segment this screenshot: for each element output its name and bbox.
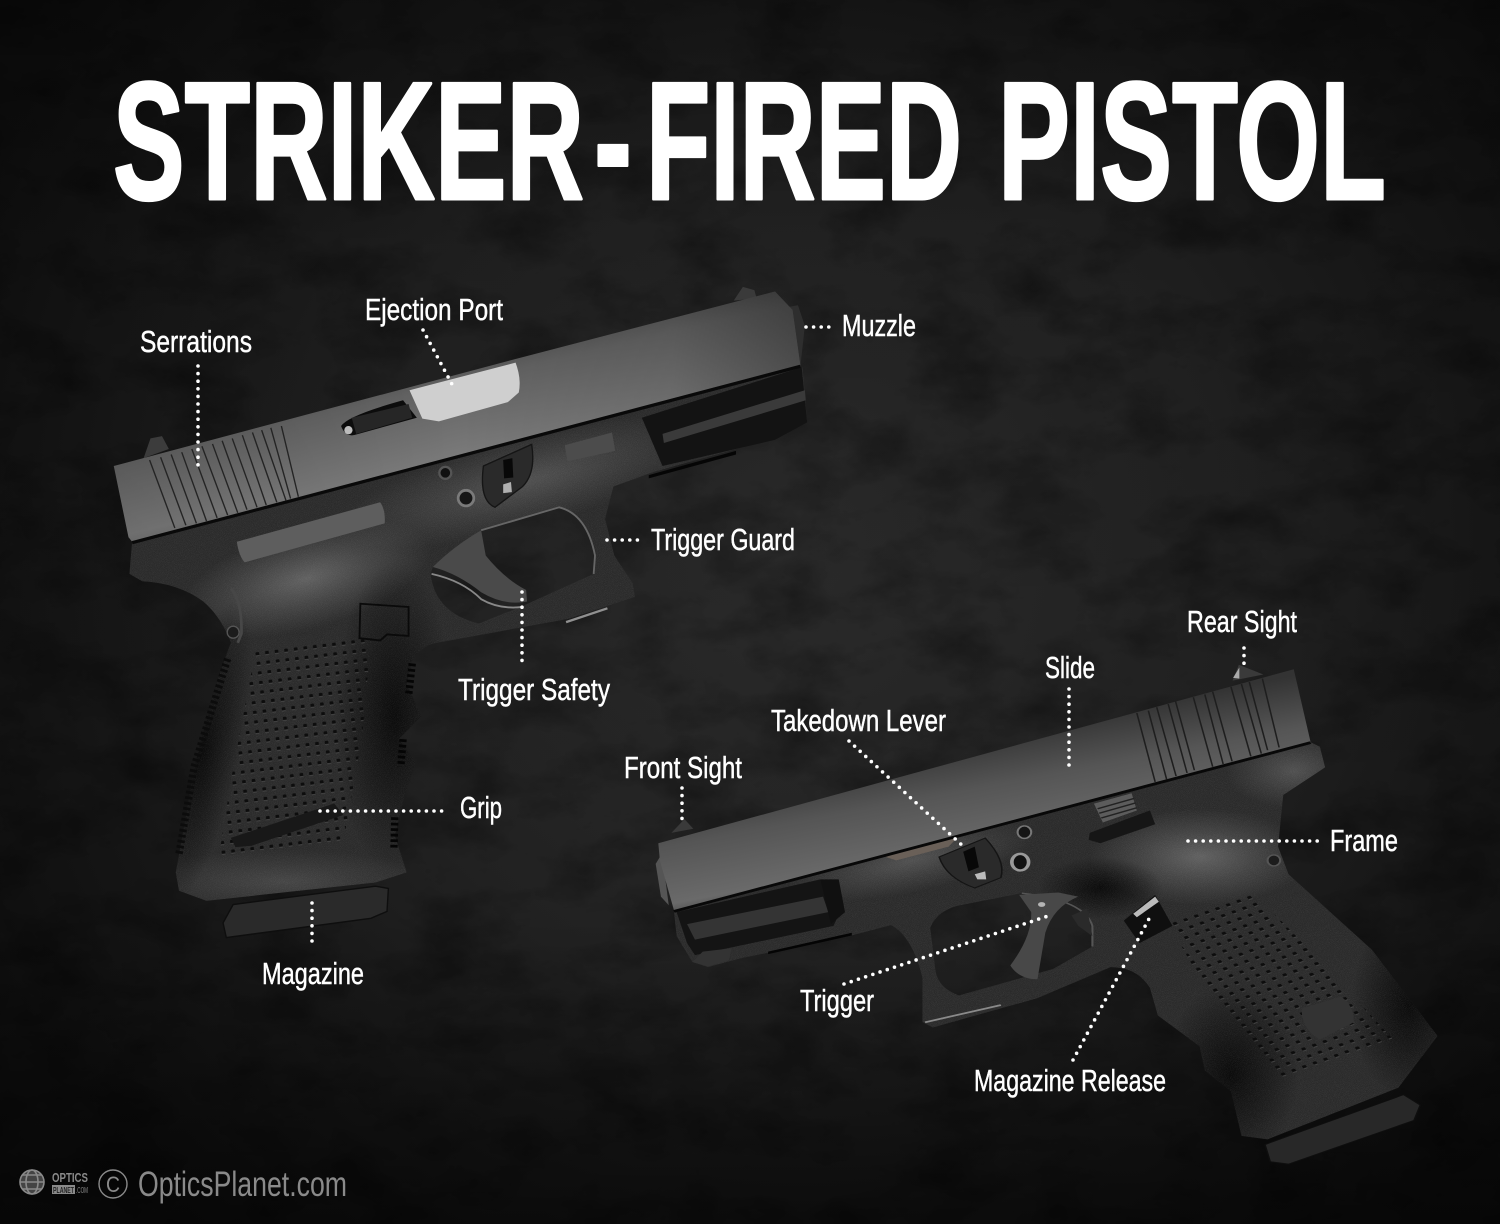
label: Magazine Release [974,917,1166,1098]
label: Grip: Grip [460,790,502,825]
title [113,47,1386,235]
frame and grip [130,368,807,901]
finger groove serration [394,663,412,849]
pistol: right view, pointing left [640,665,1466,1164]
frame pins [1018,826,1031,838]
label: Trigger: Trigger [800,983,874,1018]
takedown lever [939,838,1002,888]
label: Takedown Lever [771,703,964,847]
label: Rear Sight: Rear Sight [1187,604,1297,639]
grip thumb swoosh [231,803,343,847]
serrations [1137,679,1279,782]
label: Magazine: Magazine [262,956,364,991]
grip square plate [1302,996,1354,1040]
label: Muzzle: Muzzle [842,308,916,343]
rail block [642,367,807,466]
label: Magazine [262,903,364,991]
magazine base [1265,1095,1420,1164]
trigger guard inner edge [1022,893,1092,947]
frame and grip [674,742,1438,1140]
label: Ejection Port: Ejection Port [365,292,503,327]
label: Trigger Guard: Trigger Guard [651,522,795,557]
ejection port [410,363,520,421]
slide stop lever [1089,810,1155,843]
label: Takedown Lever: Takedown Lever [771,703,946,738]
footer: OpticsPlanet logo and copyright: .COM [76,1186,88,1195]
takedown lever [482,444,533,507]
footer: OpticsPlanet logo and copyright [20,1165,347,1204]
rail block [677,879,841,955]
title: FIRED [646,47,962,235]
title: STRIKER [113,47,584,235]
rear strap serration [179,659,228,854]
title: - [594,47,632,235]
footer: OpticsPlanet logo and copyright: OPTICS [52,1170,88,1185]
frame label plate [237,502,385,562]
label: Frame: Frame [1330,823,1398,858]
slide [656,665,1310,911]
rail label plate [565,432,615,461]
grip stipple texture [1168,891,1393,1081]
breech window [341,400,417,435]
icon: copyright [99,1170,127,1198]
trigger [433,530,527,603]
magazine catch outline [359,604,409,640]
label: Slide: Slide [1045,650,1095,685]
label: Trigger [800,915,1051,1018]
label: Serrations: Serrations [140,324,252,359]
label: Ejection Port [365,292,503,388]
pistol: left view, pointing right [100,287,816,938]
label: Front Sight [624,750,742,822]
magazine base [223,886,388,938]
icon: globe [20,1170,44,1194]
footer: OpticsPlanet logo and copyright: OpticsPlanet.com [138,1165,347,1204]
footer: OpticsPlanet logo and copyright: C [106,1172,120,1197]
label: Rear Sight [1187,604,1297,668]
label: Trigger Safety: Trigger Safety [458,672,610,707]
frame pins [439,467,451,479]
slide [114,287,805,543]
grip stipple texture [218,634,372,860]
serrations [150,426,298,528]
footer: OpticsPlanet logo and copyright: PLANET [53,1186,74,1195]
trigger guard inner edge [481,507,595,574]
label: Slide [1045,650,1095,772]
label: Front Sight: Front Sight [624,750,742,785]
label: Muzzle [806,308,916,343]
trigger [1010,892,1078,979]
magazine release [1124,895,1172,943]
label: Magazine Release: Magazine Release [974,1063,1166,1098]
